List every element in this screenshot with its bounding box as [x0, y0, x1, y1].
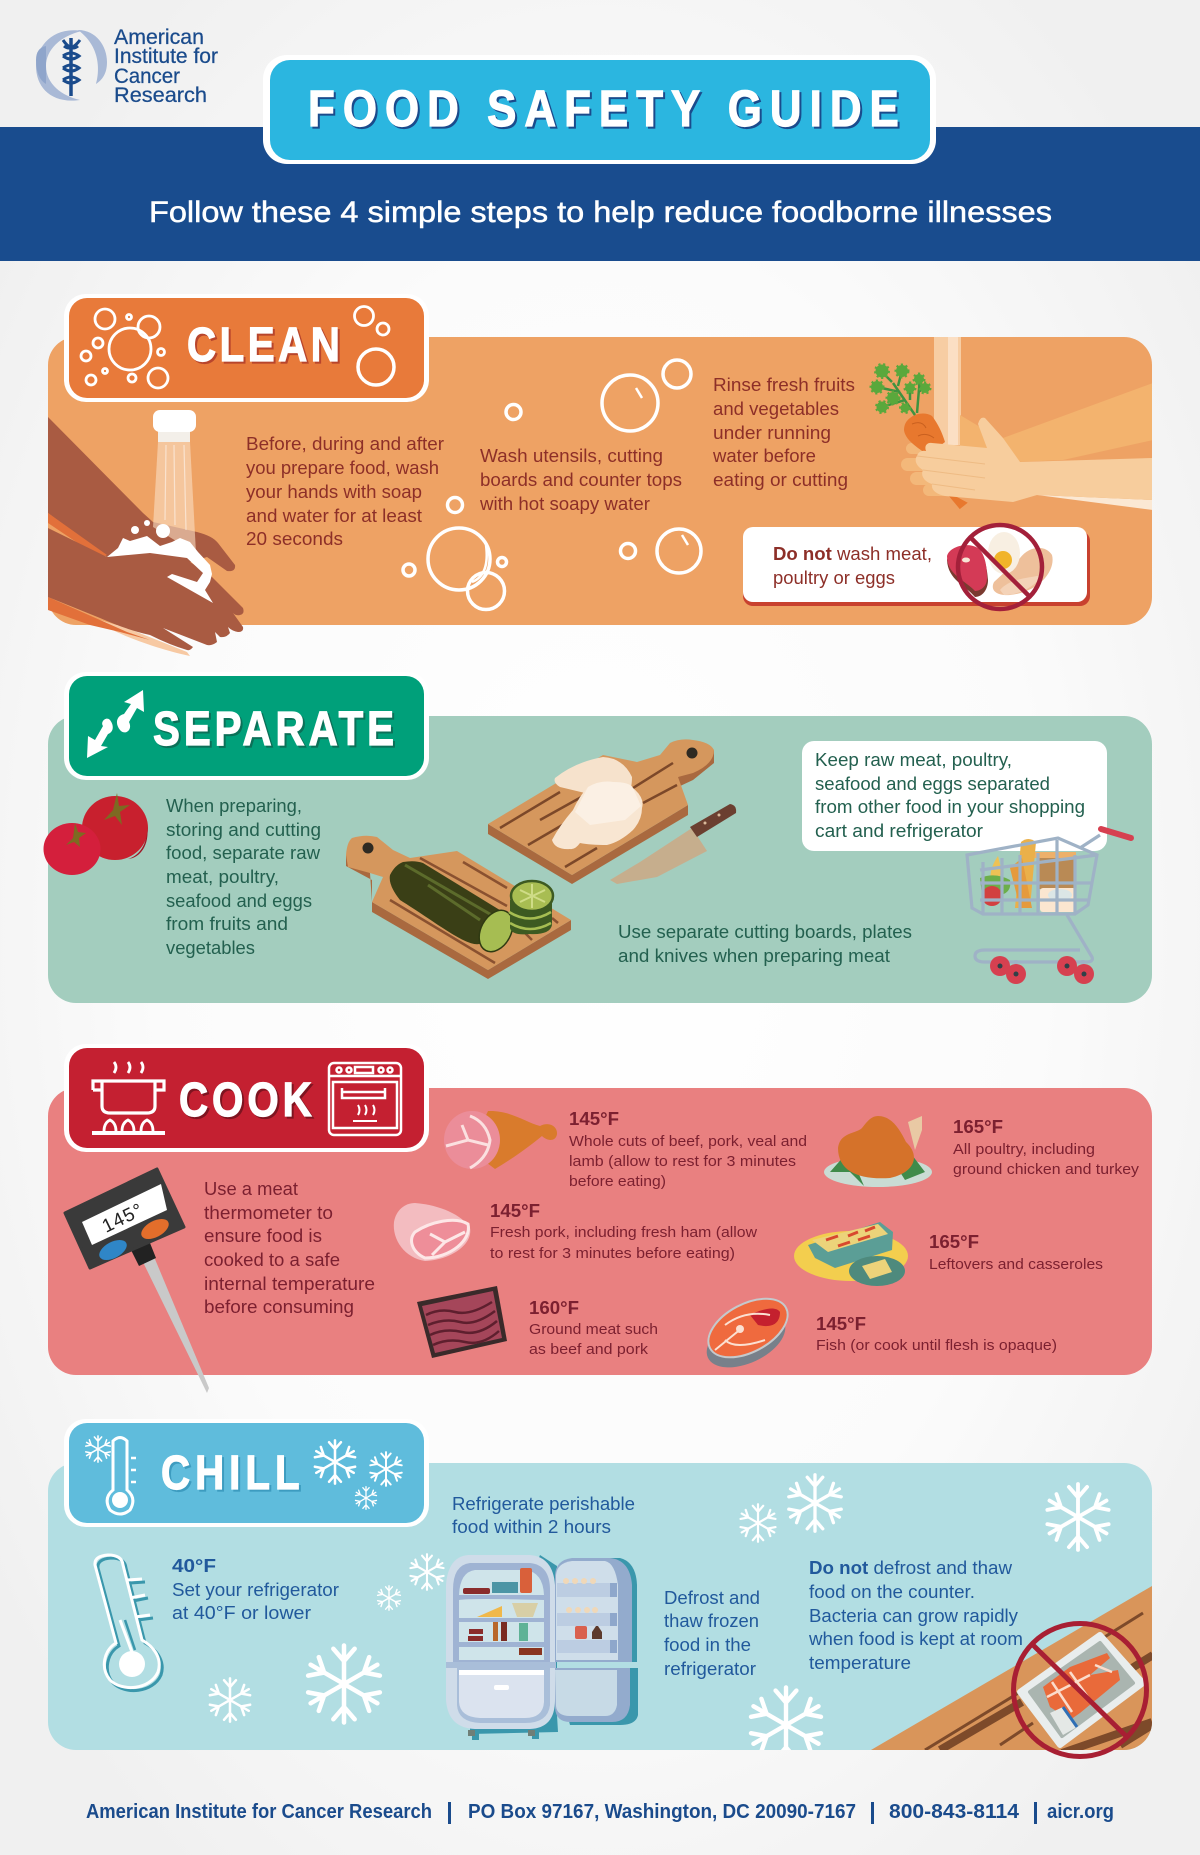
callout: do not wash meat: poultry or eggs [773, 568, 895, 588]
panel: separate [44, 716, 1152, 1003]
text: separate produce: from fruits and [166, 914, 288, 934]
text: leftovers: Leftovers and casseroles [929, 1256, 1103, 1273]
text: poultry: ground chicken and turkey [953, 1161, 1140, 1178]
text: wash utensils: Wash utensils, cutting [480, 446, 663, 466]
text: wash utensils [479, 446, 682, 514]
right door [600, 1558, 637, 1662]
text: whole cuts: Whole cuts of beef, pork, veal and [569, 1133, 807, 1150]
text: separate boards: Use separate cutting boards, plates [618, 922, 912, 942]
illustration: rinsing hand and carrot [871, 337, 1153, 510]
callout: do not wash meat [743, 525, 1090, 609]
logo wordmark: Cancer [114, 65, 180, 88]
text: separate boards: and knives when preparing meat [618, 946, 890, 966]
text: wash utensils: boards and counter tops [480, 470, 682, 490]
text: do not defrost on counter: Bacteria can grow rapidly [809, 1606, 1018, 1626]
text: wash utensils: with hot soapy water [479, 494, 650, 514]
text: separate produce: When preparing, [166, 796, 302, 816]
text: wash hands [246, 434, 444, 549]
upper arm [48, 417, 235, 575]
text: wash hands: 20 seconds [246, 529, 343, 549]
text: rinse produce: under running [713, 423, 831, 443]
heading: separate: SEPARATE [153, 703, 394, 756]
icon: thermometer [95, 1555, 162, 1691]
text: ground meat: as beef and pork [529, 1341, 649, 1358]
heading: clean: CLEAN [187, 319, 340, 372]
lower arm shadow layers [100, 620, 190, 656]
text: defrost in fridge [664, 1588, 760, 1679]
icon: casserole [794, 1222, 908, 1286]
text: rinse produce: eating or cutting [713, 470, 848, 490]
logo wordmark: Research [114, 84, 207, 107]
icon: no meat or eggs [947, 525, 1053, 609]
text: use a thermometer: internal temperature [204, 1274, 375, 1294]
logo: American Institute for Cancer Research [36, 26, 218, 107]
text: separate produce [166, 796, 321, 958]
text: use a thermometer: ensure food is [204, 1226, 322, 1246]
text: poultry: All poultry, including [953, 1141, 1095, 1158]
tab: separate [64, 672, 429, 780]
icon: open refrigerator [446, 1555, 638, 1740]
soap foam [107, 536, 213, 603]
subtitle: Follow these 4 simple steps to help reduce foodborne illnesses [149, 196, 1052, 229]
text: leftovers [929, 1232, 1103, 1273]
text: rinse produce: Rinse fresh fruits [713, 375, 855, 395]
text: separate produce: vegetables [166, 938, 255, 958]
icon: ground meat tray [417, 1286, 507, 1358]
callout: do not wash meat: Do not wash meat, [773, 544, 932, 564]
text: use a thermometer: before consuming [204, 1297, 354, 1317]
tab: cook [64, 1044, 429, 1152]
icon: cutting board with cucumber [346, 836, 571, 979]
icon: tab thermometer and snowflakes [85, 1436, 403, 1514]
text: fish [816, 1314, 1057, 1354]
text: do not defrost on counter [808, 1558, 1023, 1673]
text: fresh pork: Fresh pork, including fresh ham (allow [490, 1224, 757, 1241]
text: refrigerate perishable: food within 2 hours [452, 1517, 611, 1537]
text: set refrigerator: 40°F [172, 1556, 216, 1576]
text: fresh pork [490, 1201, 757, 1262]
text: leftovers: 165°F [929, 1232, 979, 1252]
text: set refrigerator: Set your refrigerator [172, 1580, 339, 1600]
logo wordmark: American [114, 26, 204, 49]
icon: meat thermometer [65, 1169, 209, 1393]
icon: tomatoes [44, 793, 148, 875]
icon: oven [329, 1063, 401, 1135]
header band [0, 127, 1200, 261]
illustration: washing hands under tap [48, 410, 244, 656]
text: use a thermometer: cooked to a safe [204, 1250, 340, 1270]
footer contact line: aicr.org [1047, 1800, 1114, 1823]
icon: no thawing on counter [1014, 1624, 1146, 1756]
text: poultry [953, 1117, 1140, 1178]
text: rinse produce [712, 375, 855, 490]
text: whole cuts [569, 1109, 807, 1190]
text: separate produce: seafood and eggs [166, 891, 312, 911]
text: refrigerate perishable [452, 1494, 635, 1537]
footer contact line [86, 1800, 1114, 1824]
icon: cutting board with raw chicken [488, 739, 714, 884]
bubbles [403, 360, 701, 610]
callout: keep raw meat separated: from other food in your shopping [815, 797, 1085, 817]
tab: chill [64, 1419, 429, 1527]
panel: chill [48, 1463, 1153, 1763]
callout: keep raw meat separated: cart and refrigerator [815, 821, 983, 841]
text: wash hands: and water for at least [246, 506, 422, 526]
icon: roast turkey [824, 1116, 932, 1187]
text: defrost in fridge: refrigerator [664, 1659, 756, 1679]
footer contact line: PO Box 97167, Washington, DC 20090-7167 [468, 1800, 856, 1823]
panel: clean [44, 294, 1153, 1824]
footer contact line: American Institute for Cancer Research [86, 1800, 432, 1823]
text: whole cuts: before eating) [569, 1173, 666, 1190]
callout: keep raw meat separated: Keep raw meat, poultry, [815, 750, 1012, 770]
text: wash hands: Before, during and after [246, 434, 444, 454]
heading: chill: CHILL [161, 1447, 300, 1500]
icon: tab bubbles [81, 306, 394, 388]
text: fish: 145°F [816, 1314, 866, 1334]
text: fresh pork: to rest for 3 minutes before eating) [490, 1245, 735, 1262]
text: defrost in fridge: food in the [664, 1635, 751, 1655]
callout: keep raw meat separated: seafood and eggs separated [815, 774, 1050, 794]
icon: fresh pork [394, 1203, 470, 1261]
tap [158, 430, 190, 442]
icon: diverging arrows [87, 690, 144, 758]
text: defrost in fridge: thaw frozen [664, 1611, 759, 1631]
title pill [263, 55, 936, 164]
left door items [520, 1568, 532, 1593]
text: defrost in fridge: Defrost and [664, 1588, 760, 1608]
text: do not defrost on counter: food on the counter. [809, 1582, 975, 1602]
text: wash hands: your hands with soap [246, 482, 422, 502]
illustration: wooden counter [871, 1586, 1153, 1753]
water stream [153, 442, 196, 553]
left door body [446, 1555, 555, 1729]
text: use a thermometer: thermometer to [204, 1203, 333, 1223]
panel: cook [48, 1088, 1152, 1393]
icon: knife [610, 804, 736, 884]
text: do not defrost on counter: when food is kept at room [808, 1629, 1023, 1649]
logo wordmark [114, 26, 218, 107]
icon: pot on burner [92, 1062, 165, 1133]
icon: shopping cart [967, 829, 1131, 984]
text: set refrigerator [172, 1556, 339, 1623]
callout: keep raw meat separated [802, 741, 1107, 851]
icon: fish steak [698, 1287, 797, 1379]
text: rinse produce: water before [712, 446, 816, 466]
heading: cook: COOK [179, 1074, 312, 1127]
snowflakes [208, 1475, 1111, 1763]
text: separate boards [618, 922, 912, 966]
footer contact line: 800-843-8114 [889, 1800, 1020, 1823]
logo wordmark: Institute for [114, 45, 218, 68]
text: do not defrost on counter: Do not defrost and thaw [809, 1558, 1013, 1578]
tab: clean [64, 294, 429, 402]
icon: logo caduceus [36, 30, 107, 101]
text: ground meat: 160°F [529, 1298, 579, 1318]
icon: ham [444, 1111, 557, 1169]
text: ground meat [529, 1298, 658, 1358]
text: separate produce: storing and cutting [166, 820, 321, 840]
text: refrigerate perishable: Refrigerate perishable [452, 1494, 635, 1514]
text: rinse produce: and vegetables [713, 399, 839, 419]
text: set refrigerator: at 40°F or lower [172, 1603, 311, 1623]
text: wash hands: you prepare food, wash [246, 458, 439, 478]
text: whole cuts: lamb (allow to rest for 3 minutes [569, 1153, 796, 1170]
thermometer reading: 145° [99, 1200, 147, 1237]
title: FOOD SAFETY GUIDE [308, 81, 899, 138]
text: separate produce: meat, poultry, [166, 867, 279, 887]
text: poultry: 165°F [953, 1117, 1003, 1137]
text: fish: Fish (or cook until flesh is opaque) [816, 1337, 1057, 1354]
text: use a thermometer [204, 1179, 375, 1317]
lower arm [48, 528, 244, 650]
text: fresh pork: 145°F [490, 1201, 540, 1221]
text: ground meat: Ground meat such [529, 1321, 658, 1338]
text: whole cuts: 145°F [569, 1109, 619, 1129]
text: separate produce: food, separate raw [166, 843, 321, 863]
text: use a thermometer: Use a meat [204, 1179, 298, 1199]
text: do not defrost on counter: temperature [809, 1653, 911, 1673]
